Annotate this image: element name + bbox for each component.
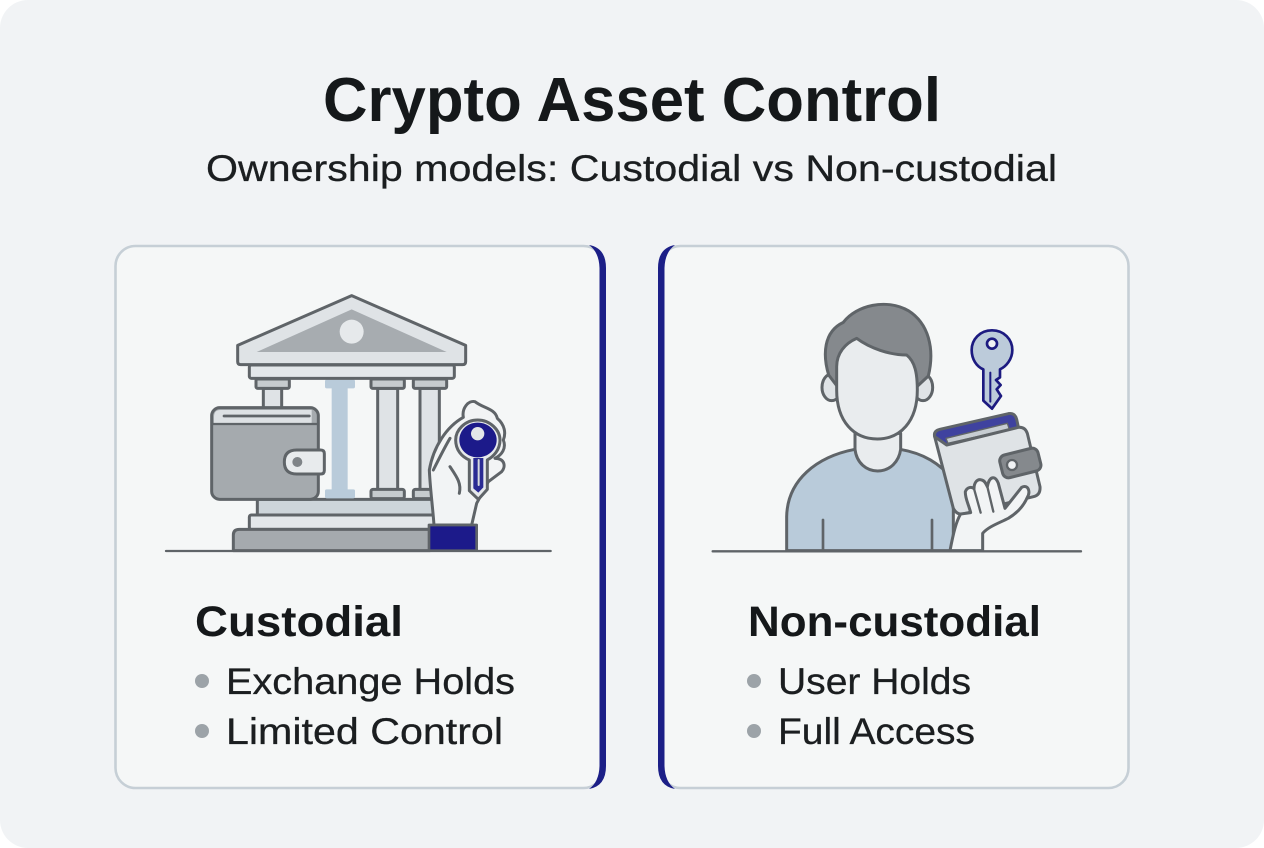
icon: navy cuff <box>429 525 477 551</box>
accent edge <box>658 245 675 789</box>
icon: floating key <box>972 330 1012 409</box>
card background <box>660 246 1128 788</box>
illustration: person with key and wallet <box>713 304 1081 551</box>
icon: wallet in hand <box>934 414 1042 514</box>
icon: bank roof <box>238 296 466 378</box>
panel: custodial <box>116 245 606 789</box>
icon: hand <box>950 478 1029 551</box>
subtitle: Ownership models: Custodial vs Non-custodial <box>206 148 1057 189</box>
heading: custodial: Custodial <box>195 598 403 646</box>
icon: bank columns <box>256 379 447 499</box>
list: non-custodial points: Full Access <box>778 711 975 752</box>
icon: hand holding key <box>429 401 505 525</box>
icon: ears <box>822 374 841 401</box>
ground line <box>166 547 551 554</box>
heading: non-custodial: Non-custodial <box>748 598 1041 646</box>
icon: highlighted blue column <box>325 380 355 498</box>
list: non-custodial points <box>747 661 975 752</box>
icon: hair <box>825 304 931 390</box>
icon: person body <box>787 449 953 551</box>
card background <box>116 246 604 788</box>
illustration: bank, wallet and key in hand <box>166 296 551 551</box>
title: Crypto Asset Control <box>323 66 941 135</box>
accent edge <box>589 245 606 789</box>
list: custodial points: Exchange Holds <box>226 661 515 702</box>
list: custodial points: Limited Control <box>226 711 503 752</box>
panel: non-custodial <box>658 245 1128 789</box>
icon: neck <box>855 433 901 471</box>
icon: face <box>837 338 917 439</box>
list: non-custodial points: User Holds <box>778 661 971 702</box>
icon: bank steps <box>233 499 434 551</box>
icon: wallet <box>212 408 324 499</box>
ground line <box>713 548 1081 555</box>
list: custodial points <box>195 661 515 752</box>
key <box>456 420 500 499</box>
